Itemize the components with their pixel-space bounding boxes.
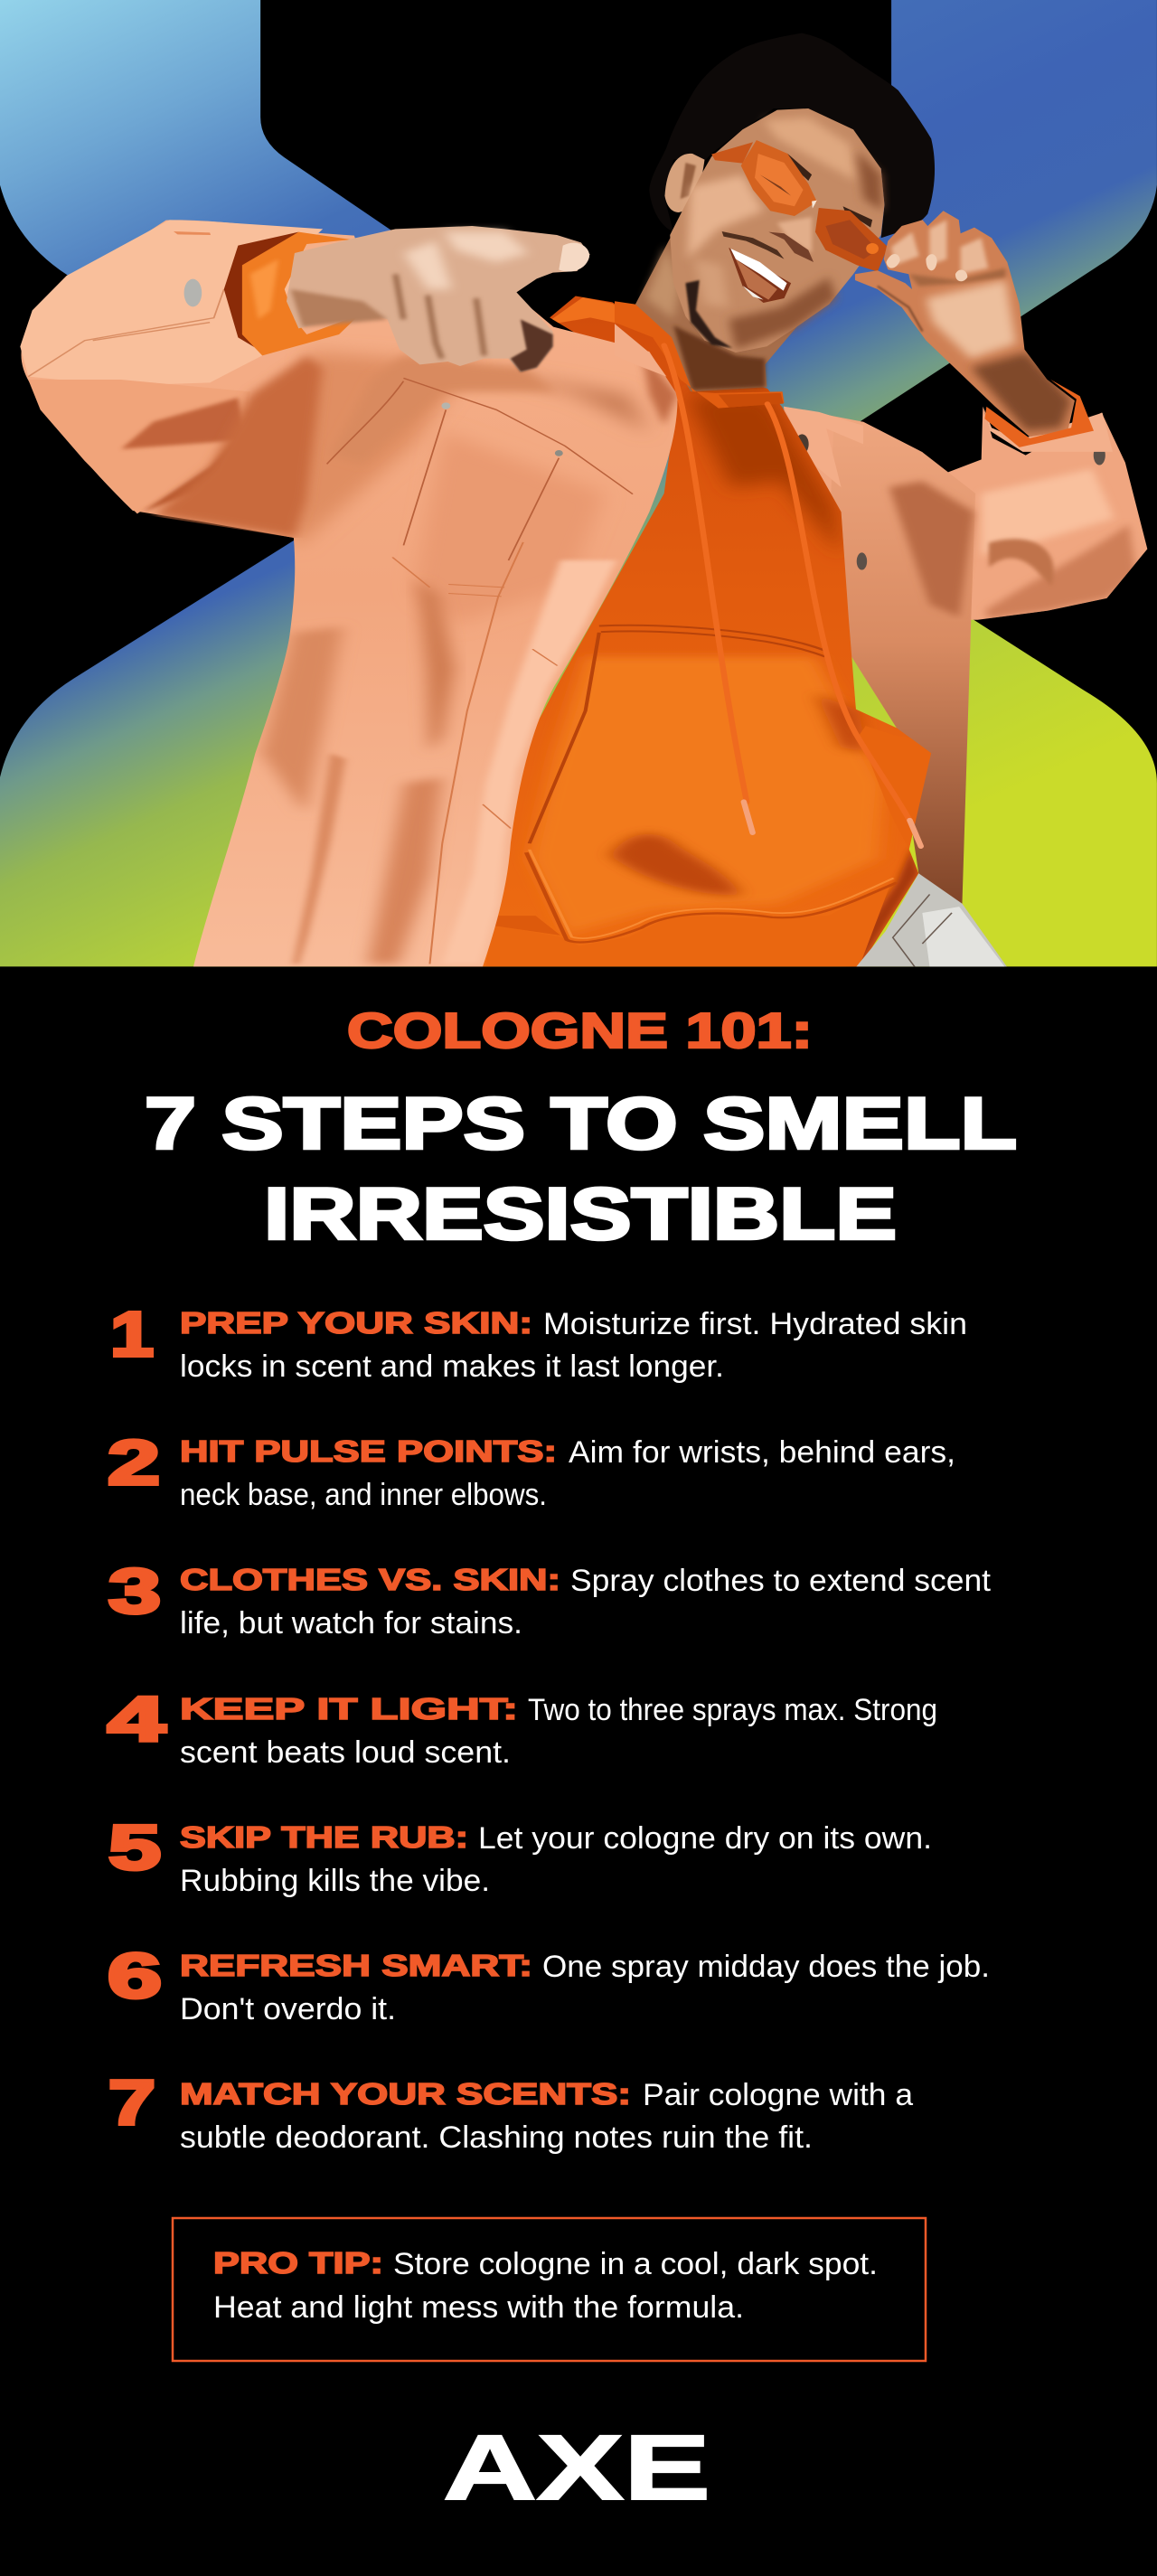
jaw shade — [729, 277, 836, 350]
palm highlight — [926, 280, 1016, 359]
step 7 — [108, 2067, 914, 2155]
chest rivets — [441, 402, 563, 456]
step 2 text — [180, 1434, 955, 1512]
step 1 text: Moisturize first. Hydrated skin — [543, 1307, 967, 1341]
chin light — [694, 259, 729, 307]
thumb edge — [878, 287, 923, 332]
hood collar around neck — [615, 301, 784, 409]
mustache — [722, 231, 784, 259]
knuckle shadow — [908, 268, 1005, 287]
hood drawcord channel — [719, 393, 784, 408]
finger separators — [396, 274, 484, 359]
step 2 — [108, 1427, 955, 1512]
pro tip callout — [173, 2218, 926, 2361]
number 5: 5 — [108, 1812, 161, 1883]
orange sunglasses — [711, 140, 888, 272]
step 6 text: REFRESH SMART: — [180, 1949, 532, 1982]
sleeve snap button — [184, 279, 202, 306]
jacket collar left piece — [615, 324, 666, 377]
knuckle highlights — [403, 232, 529, 289]
button — [798, 434, 809, 451]
step 5 text: SKIP THE RUB: — [180, 1820, 468, 1854]
rib band — [839, 888, 889, 967]
hair — [649, 33, 935, 238]
step 3 text: CLOTHES VS. SKIN: — [180, 1563, 560, 1596]
peach sleeve cuff — [983, 407, 1113, 452]
right hand and wrist — [855, 211, 1113, 452]
sleeve folds — [889, 469, 1136, 618]
hoodie — [457, 296, 931, 967]
cheek light — [687, 174, 764, 259]
step 6 text — [180, 1949, 990, 2026]
step 7 text: Pair cologne with a — [643, 2078, 914, 2112]
ear — [664, 154, 704, 212]
pouch light area — [530, 657, 884, 934]
step 1 — [110, 1299, 967, 1384]
fingertips — [886, 254, 967, 281]
step 3 text: Spray clothes to extend scent — [570, 1564, 991, 1598]
pouch seam — [526, 852, 897, 942]
number 3: 3 — [108, 1556, 161, 1626]
tab — [174, 231, 211, 235]
step 3 text: life, but watch for stains. — [180, 1606, 522, 1641]
head group — [615, 33, 1113, 452]
step 4 text — [180, 1692, 937, 1770]
light trousers — [856, 873, 1007, 967]
step 3 text — [180, 1563, 991, 1641]
orange left cuff — [224, 232, 359, 355]
step 5 text: Let your cologne dry on its own. — [478, 1821, 932, 1856]
step 6 text: One spray midday does the job. — [542, 1950, 990, 1984]
title: 7 STEPS TO SMELL — [145, 1083, 1017, 1164]
dark finger side — [511, 319, 553, 372]
step 7 text — [180, 2077, 914, 2155]
hoodie drawstrings — [664, 345, 921, 846]
sleeve seam — [28, 289, 224, 377]
pouch fold shadows — [610, 834, 741, 895]
chest seam — [327, 378, 633, 560]
step 4 text: scent beats loud scent. — [180, 1735, 511, 1770]
gradient X shape background — [0, 0, 1157, 967]
forehead temple shade — [857, 151, 883, 211]
AXE logo: AXE — [443, 2416, 710, 2519]
step 5 text — [180, 1820, 932, 1898]
step 2 text: Aim for wrists, behind ears, — [569, 1435, 955, 1470]
face — [670, 108, 884, 353]
callout text: PRO TIP: — [213, 2246, 383, 2280]
pocket flap — [860, 726, 931, 850]
step 1 text — [180, 1306, 967, 1384]
step 5 — [108, 1812, 932, 1898]
step 6 text: Don't overdo it. — [180, 1992, 396, 2026]
step 2 text: neck base, and inner elbows. — [180, 1478, 547, 1512]
teeth — [730, 249, 787, 291]
right inner cuff — [984, 380, 1094, 447]
number 7: 7 — [108, 2067, 155, 2138]
subtitle: COLOGNE 101: — [347, 1002, 813, 1058]
jacket left body — [21, 220, 677, 967]
hero image — [0, 0, 1157, 967]
lower teeth — [743, 286, 764, 300]
step 6 — [108, 1941, 990, 2026]
step 1 text: PREP YOUR SKIN: — [180, 1306, 532, 1340]
hand shape — [855, 211, 1075, 437]
open smiling mouth — [729, 248, 791, 303]
number 2: 2 — [108, 1427, 160, 1498]
callout text — [213, 2246, 878, 2325]
title — [145, 1083, 1017, 1255]
step 4 text: Two to three sprays max. Strong — [528, 1693, 937, 1727]
step 4 — [108, 1684, 937, 1770]
wrist shadow — [971, 353, 1071, 431]
sleeve details — [20, 220, 359, 538]
pouch top seam — [530, 625, 825, 843]
callout text: Store cologne in a cool, dark spot. — [393, 2247, 878, 2281]
number 1: 1 — [110, 1299, 154, 1369]
body beside sleeve shade — [154, 355, 323, 538]
neck — [635, 235, 798, 391]
step 7 text: subtle deodorant. Clashing notes ruin the fit. — [180, 2120, 813, 2155]
jacket right side and sleeve — [784, 407, 1147, 913]
lower sleeve shading — [28, 380, 250, 513]
finger lights — [891, 220, 988, 274]
index fingertip — [559, 243, 589, 272]
brows — [785, 154, 872, 228]
number 4: 4 — [108, 1684, 165, 1754]
front placket highlight — [442, 560, 616, 964]
jacket vertical folds — [418, 578, 455, 753]
step 7 text: MATCH YOUR SCENTS: — [180, 2077, 631, 2111]
left sleeve and pointing hand group — [20, 220, 633, 560]
jacket shoulder under hand — [331, 355, 557, 464]
step 3 — [108, 1556, 991, 1641]
hand — [287, 226, 590, 372]
callout text: Heat and light mess with the formula. — [213, 2290, 744, 2325]
title: IRRESISTIBLE — [264, 1173, 897, 1255]
jacket stitching — [392, 542, 558, 964]
step 2 text: HIT PULSE POINTS: — [180, 1434, 557, 1468]
tongue — [736, 259, 777, 300]
number 6: 6 — [108, 1941, 162, 2011]
wrist shadow — [290, 289, 388, 327]
right cuff button — [1094, 452, 1105, 465]
forehead light — [764, 118, 857, 181]
step 4 text: KEEP IT LIGHT: — [180, 1692, 518, 1725]
step 5 text: Rubbing kills the vibe. — [180, 1864, 490, 1898]
callout border — [173, 2218, 926, 2361]
lower button — [857, 552, 867, 570]
step 1 text: locks in scent and makes it last longer. — [180, 1349, 724, 1384]
man in peach jacket and orange hoodie — [20, 33, 1147, 967]
goatee — [685, 280, 732, 348]
jacket collar right — [784, 407, 863, 487]
nose — [777, 217, 812, 253]
